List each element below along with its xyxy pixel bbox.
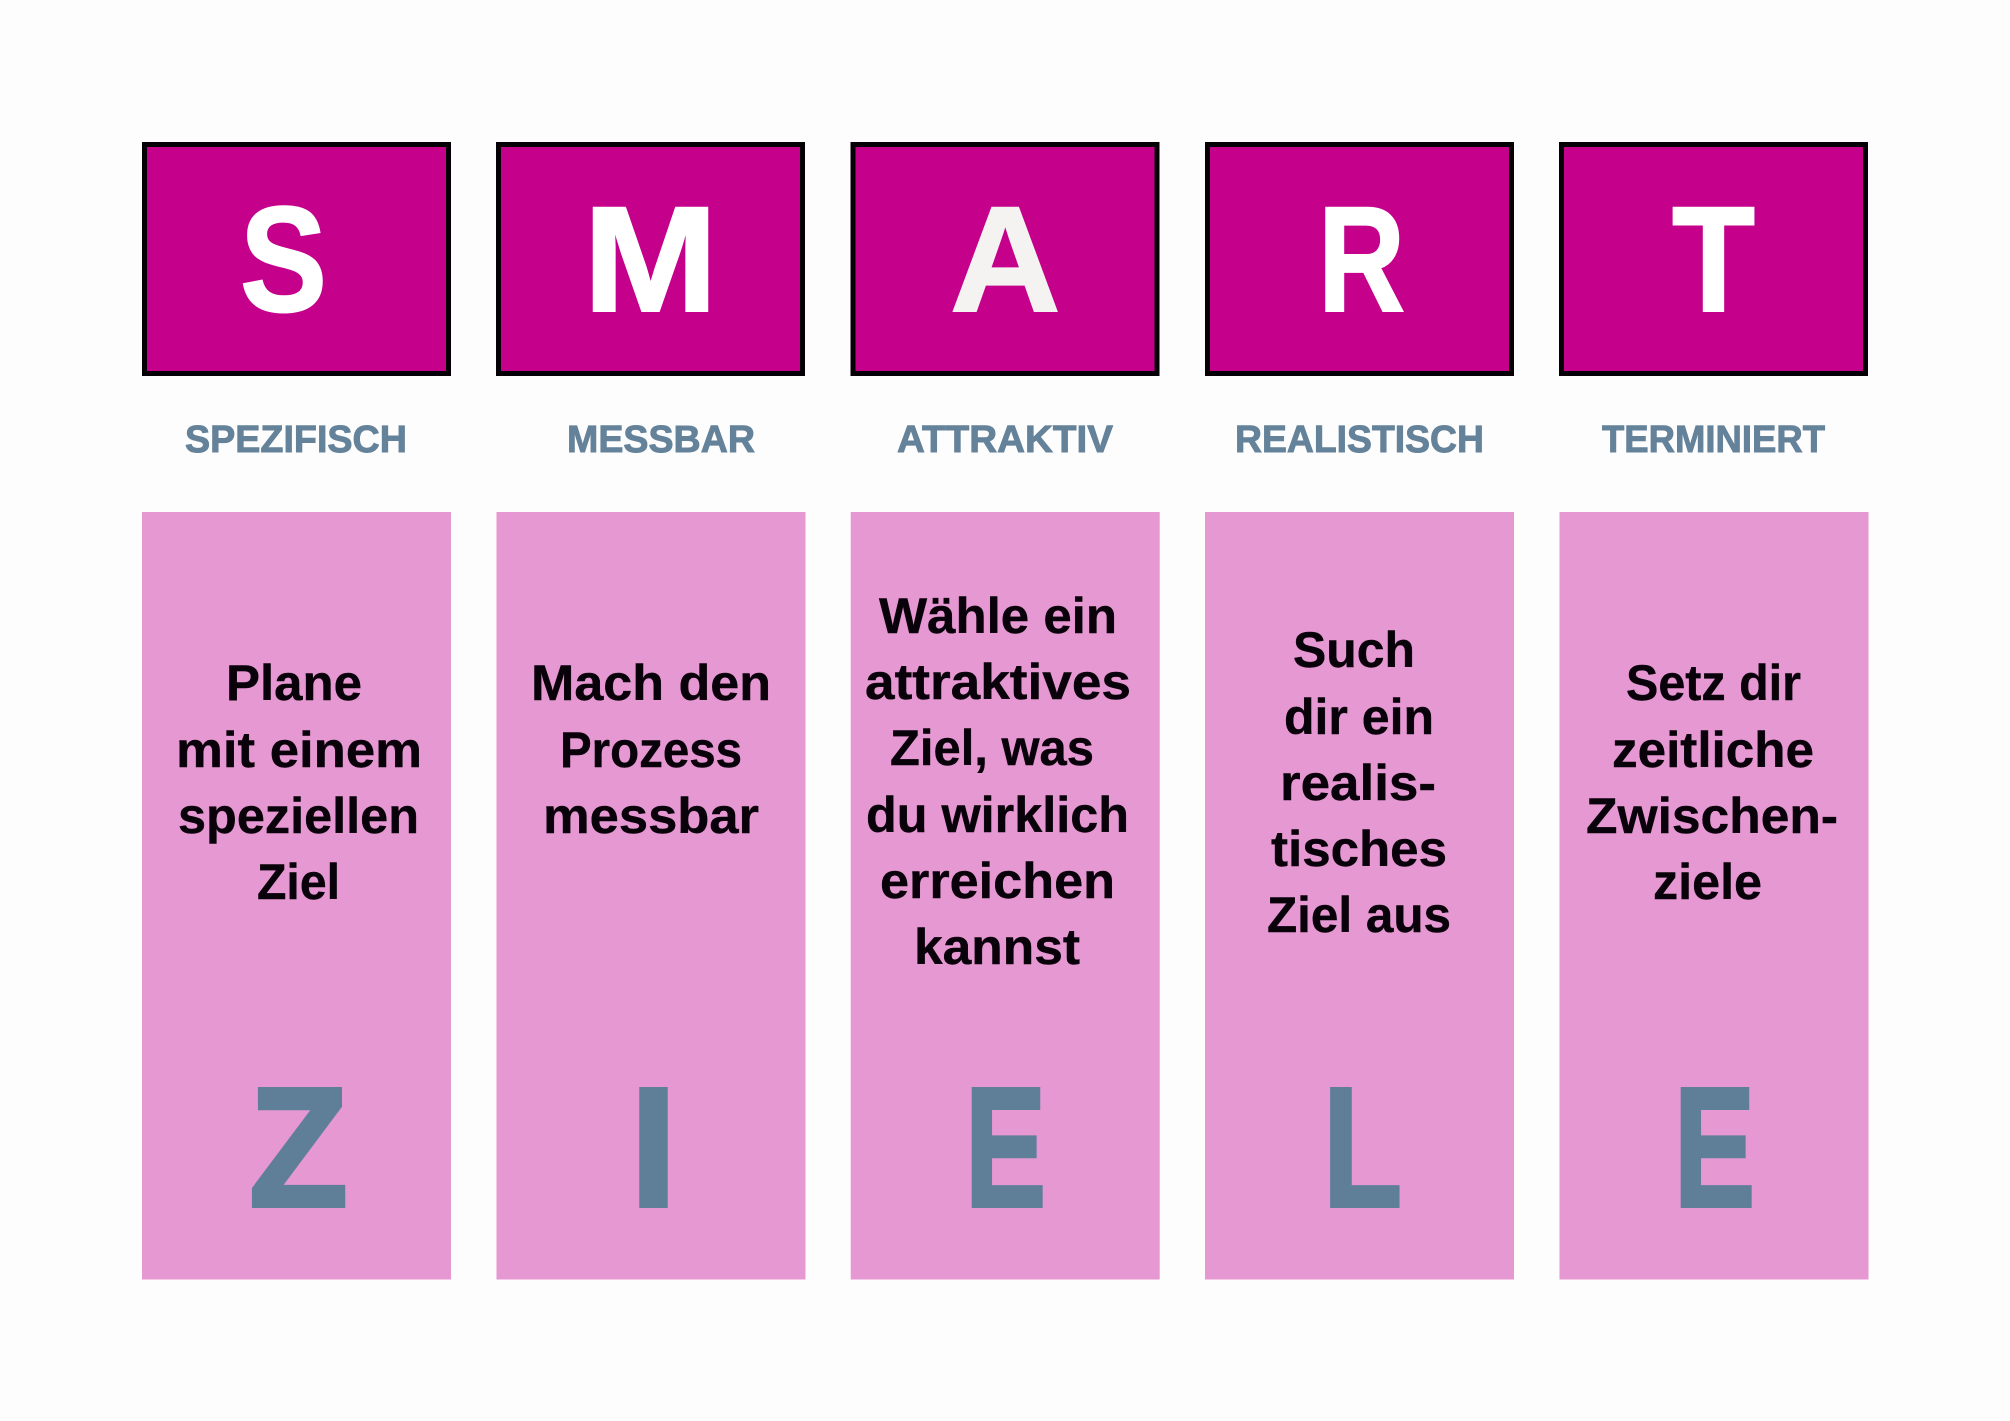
description: Attraktiv: Ziel, was (890, 720, 1094, 776)
letter box M (498, 144, 802, 374)
label: Terminiert: TERMINIERT (1602, 419, 1825, 461)
description: Terminiert (1586, 655, 1838, 910)
letter box S: S (240, 175, 327, 343)
description: Realistisch: Such (1293, 622, 1415, 678)
description: Spezifisch: Ziel (257, 854, 340, 910)
description: Messbar: Prozess (560, 722, 742, 778)
description: Attraktiv: erreichen (880, 853, 1115, 909)
description: Messbar (531, 655, 771, 844)
column: S Spezifisch (142, 144, 451, 1280)
description: Realistisch: dir ein (1284, 689, 1434, 745)
letter box T (1562, 144, 1866, 374)
letter E: E (965, 1053, 1046, 1243)
letter I: I (630, 1053, 677, 1243)
description: Attraktiv: Wähle ein (879, 588, 1117, 644)
description: Attraktiv (865, 588, 1131, 975)
letter box S (144, 144, 448, 374)
column: M Messbar (496, 144, 806, 1280)
letter box T: T (1672, 175, 1755, 343)
letter box M: M (583, 175, 718, 343)
label: Realistisch: REALISTISCH (1235, 419, 1484, 461)
panel: Attraktiv (851, 512, 1160, 1280)
letter box A: A (950, 175, 1060, 343)
description: Realistisch: realis- (1280, 755, 1436, 811)
column: T Terminiert (1560, 144, 1868, 1280)
column: A Attraktiv (851, 144, 1160, 1280)
panel: Terminiert (1560, 512, 1868, 1280)
label: Attraktiv: ATTRAKTIV (897, 419, 1114, 461)
description: Terminiert: Zwischen- (1586, 788, 1838, 844)
panel: Spezifisch (142, 512, 451, 1280)
description: Realistisch: tisches (1271, 821, 1447, 877)
description: Spezifisch (176, 655, 422, 910)
description: Realistisch: Ziel aus (1267, 887, 1451, 943)
description: Messbar: Mach den (531, 655, 771, 711)
label: Messbar: MESSBAR (567, 419, 755, 461)
letter E: E (1674, 1053, 1755, 1243)
letter box A (853, 144, 1157, 374)
letter Z: Z (249, 1053, 348, 1243)
letter box R (1208, 144, 1512, 374)
panel: Messbar (496, 512, 806, 1280)
description: Attraktiv: kannst (914, 919, 1080, 975)
column: R Realistisch (1205, 144, 1514, 1280)
letter L: L (1323, 1053, 1402, 1243)
description: Spezifisch: mit einem (176, 722, 422, 778)
description: Messbar: messbar (543, 788, 759, 844)
description: Spezifisch: speziellen (178, 788, 419, 844)
label: Spezifisch: SPEZIFISCH (185, 419, 407, 461)
letter box R: R (1318, 175, 1405, 343)
description: Realistisch (1267, 622, 1451, 943)
description: Attraktiv: attraktives (865, 654, 1131, 710)
description: Spezifisch: Plane (226, 655, 362, 711)
description: Terminiert: ziele (1653, 854, 1762, 910)
description: Terminiert: Setz dir (1626, 655, 1801, 711)
description: Terminiert: zeitliche (1612, 722, 1814, 778)
description: Attraktiv: du wirklich (866, 787, 1129, 843)
panel: Realistisch (1205, 512, 1514, 1280)
